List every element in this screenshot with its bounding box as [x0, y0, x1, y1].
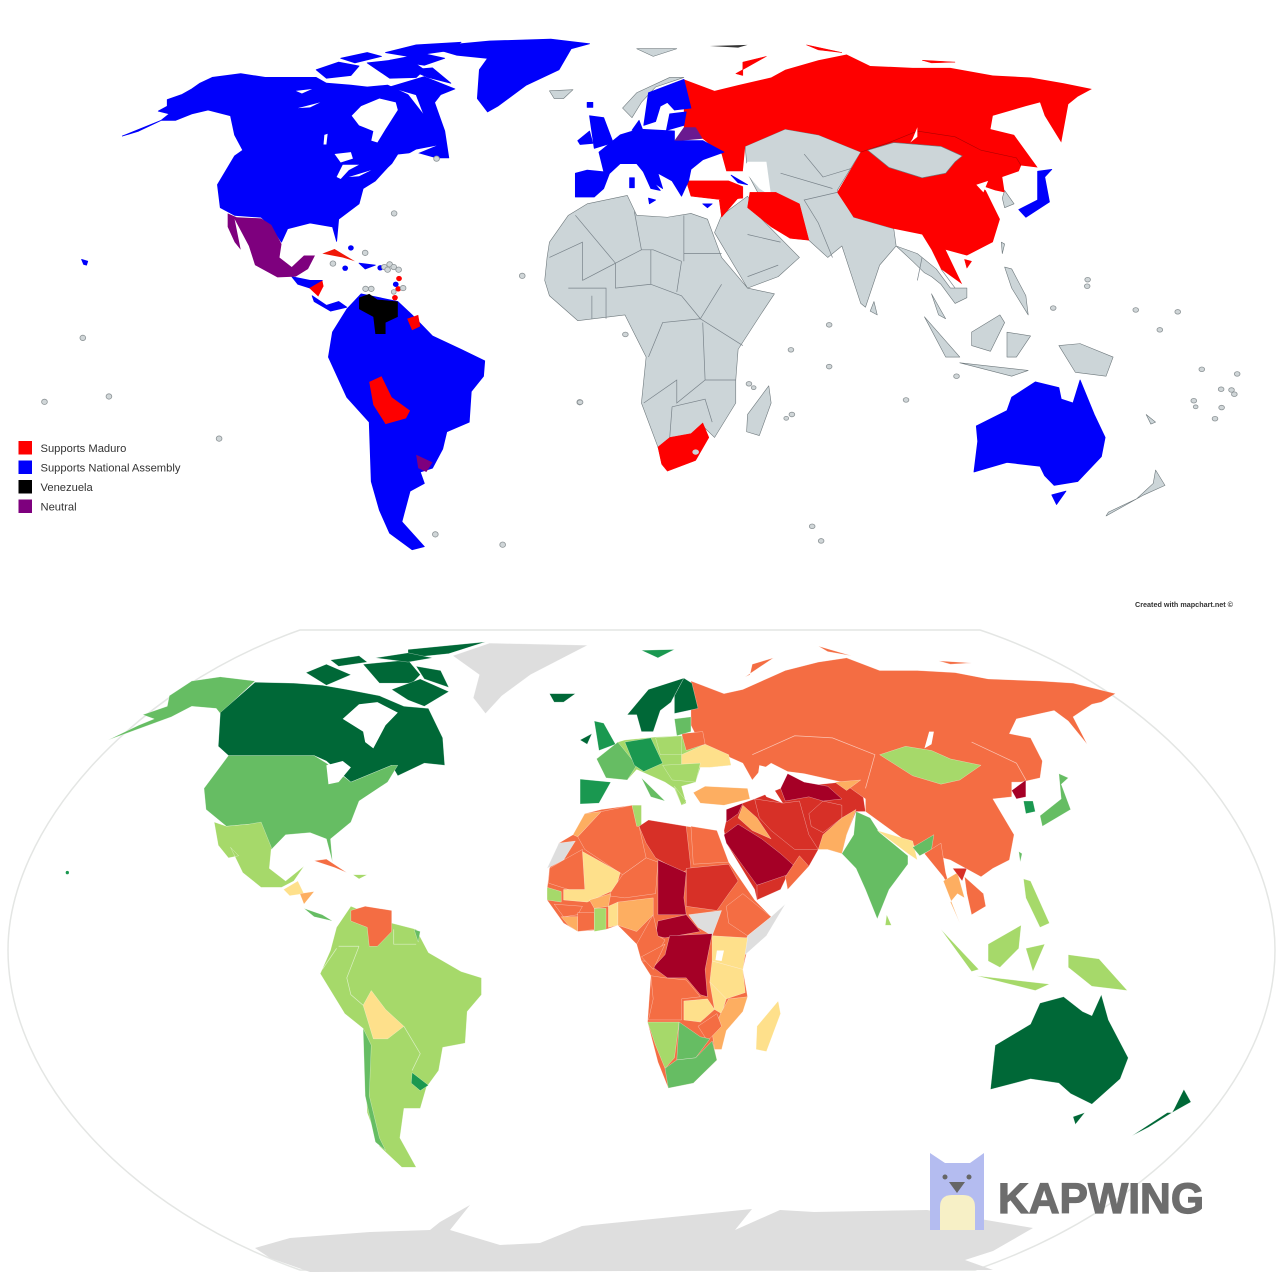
Ivory Coast	[578, 913, 594, 932]
Philippines	[1023, 879, 1049, 927]
blue islands	[342, 245, 399, 287]
French Guiana	[414, 929, 420, 942]
legend	[18, 441, 181, 514]
Lake Victoria	[715, 950, 724, 961]
China and Russia border	[861, 131, 1021, 166]
Arctic island west	[818, 646, 851, 656]
Morocco	[573, 812, 601, 837]
Svalbard	[641, 649, 674, 658]
americas, Greenland and islands	[42, 39, 590, 550]
Central African Republic	[656, 915, 700, 938]
cut-outs of Okhotsk and Bohai	[910, 127, 988, 192]
mapchart credit: Created with mapchart.net ©	[1135, 601, 1234, 609]
Turkmenistan and Uzbekistan	[781, 774, 842, 801]
Canadian Arctic islands	[306, 642, 486, 706]
Saudi Arabia	[724, 824, 797, 885]
Sulawesi	[1026, 944, 1045, 972]
Greenland	[453, 643, 588, 713]
legend item: Supports National Assembly: Supports National Assembly	[40, 462, 181, 474]
Caspian	[743, 162, 771, 196]
Guyana	[407, 315, 420, 330]
Sudan	[686, 864, 738, 910]
legend item: Neutral	[18, 500, 77, 514]
Malawi	[710, 982, 726, 1014]
Kyrgyzstan and Tajikistan	[835, 780, 861, 791]
New Zealand south island	[1132, 1113, 1172, 1136]
Hawaii	[66, 871, 69, 874]
Africa base	[547, 805, 771, 1088]
Iraq	[738, 805, 771, 839]
map outline	[8, 630, 1275, 1270]
United Kingdom	[594, 721, 615, 751]
Ireland	[580, 734, 592, 744]
Guatemala	[284, 881, 304, 896]
Nigeria	[618, 898, 653, 932]
South American borders	[322, 929, 420, 1070]
Congo and Gabon	[641, 944, 665, 969]
Finland	[674, 678, 698, 713]
Borneo	[988, 925, 1021, 967]
Russia and China	[684, 54, 1092, 284]
Turkey	[693, 786, 750, 805]
Laos	[953, 868, 967, 881]
Africa gray	[545, 49, 1165, 516]
Australia	[974, 380, 1105, 485]
Hudson Bay and lakes	[296, 89, 437, 179]
South America	[320, 906, 481, 1167]
DR Congo	[653, 934, 712, 997]
legend item: Venezuela: Venezuela	[40, 482, 94, 494]
Lake Baikal	[924, 732, 934, 748]
Canada	[218, 682, 445, 782]
legend item: Supports Maduro: Supports Maduro	[40, 443, 126, 455]
Germany and Central Europe	[625, 738, 663, 772]
Nepal and Bangladesh	[877, 830, 917, 860]
Svalbard and Franz Josef	[710, 45, 748, 48]
Libya	[639, 820, 691, 873]
Niger	[608, 858, 658, 898]
Italy	[641, 778, 665, 801]
Mozambique	[712, 997, 748, 1049]
Antarctica	[255, 1205, 1033, 1272]
Iceland	[549, 694, 575, 702]
panel: top map, support for Maduro or National Assembly	[18, 39, 1240, 609]
South Africa	[665, 1041, 717, 1088]
Mongolia	[880, 746, 981, 784]
Alaska	[108, 677, 255, 740]
Haiti and Dominican Republic	[353, 875, 367, 879]
Arctic island east	[939, 661, 972, 664]
Mali	[564, 852, 620, 902]
Poland	[656, 736, 682, 755]
wordmark: KAPWING	[998, 1175, 1204, 1223]
central and south Asia	[745, 129, 967, 307]
Burkina Faso	[590, 894, 611, 908]
Romania and Bulgaria	[663, 763, 700, 782]
United States	[204, 756, 398, 862]
Europe base	[597, 736, 731, 805]
Sierra Leone and Liberia	[561, 917, 578, 932]
South Sudan	[689, 910, 722, 936]
gray island markers	[42, 156, 583, 547]
Mongolia	[868, 143, 962, 178]
Cuba	[322, 249, 355, 261]
Chile	[363, 1028, 386, 1150]
legend item: Supports Maduro	[18, 441, 126, 455]
panel: bottom map, colored world choropleth	[8, 630, 1275, 1272]
Java	[976, 976, 1049, 990]
Taiwan	[1019, 852, 1022, 862]
Europe, Japan and Australia in blue	[575, 79, 1105, 504]
Botswana	[677, 1022, 710, 1060]
North Korea	[1012, 780, 1026, 799]
Novaya Zemlya	[745, 658, 773, 677]
watermark: Kapwing logo	[930, 1153, 1204, 1230]
Myanmar	[924, 843, 950, 889]
Western Sahara	[547, 841, 575, 868]
Tunisia	[632, 805, 641, 826]
icon: Kapwing cat	[930, 1153, 984, 1230]
Thailand and Cambodia	[943, 873, 965, 923]
Cameroon	[637, 915, 665, 961]
Somalia	[738, 904, 785, 961]
India	[842, 812, 908, 919]
Bolivia	[369, 376, 410, 424]
Sri Lanka	[885, 915, 891, 925]
Middle East and South Asia base	[724, 780, 865, 900]
Great Lakes	[326, 761, 351, 784]
France	[597, 742, 637, 780]
Americas choropleth	[66, 642, 588, 1167]
Spain and Portugal	[580, 779, 611, 804]
Madagascar	[756, 1001, 781, 1052]
Sumatra	[941, 929, 979, 972]
Arabia	[715, 196, 799, 288]
Hudson Bay	[343, 702, 398, 748]
Greenland	[428, 39, 590, 112]
Uganda and Kenya	[712, 936, 748, 969]
legend item: Neutral: Neutral	[40, 502, 77, 514]
Baltics	[674, 717, 691, 736]
Algeria	[578, 805, 646, 875]
northeast India	[913, 835, 934, 856]
Caribbean dots	[392, 276, 402, 300]
Ethiopia	[726, 894, 771, 936]
Balkans	[674, 786, 686, 805]
red countries in Asia and Africa	[658, 45, 972, 471]
Venezuela	[351, 906, 392, 946]
Benin and Togo	[608, 902, 618, 927]
Angola	[648, 976, 700, 1020]
Australia	[990, 995, 1128, 1104]
Ukraine	[682, 744, 731, 767]
legend item: Venezuela	[18, 480, 94, 494]
Yemen	[757, 875, 788, 900]
Russia borders with Kazakhstan and China	[752, 736, 1026, 788]
Russia, Kazakhstan and China	[691, 658, 1115, 877]
Mexico neutral	[228, 213, 315, 277]
Uruguay	[411, 1073, 428, 1091]
Honduras	[300, 892, 314, 904]
gray ocean island markers	[577, 277, 1240, 543]
Oman	[785, 856, 809, 889]
Ghana	[594, 908, 606, 932]
Mexico	[214, 822, 304, 887]
Egypt	[691, 826, 729, 864]
Eurasia, Africa and Oceania choropleth	[547, 646, 1191, 1136]
Venezuela	[359, 294, 398, 334]
North America in blue	[82, 39, 590, 550]
Syria	[726, 803, 743, 822]
Nicaragua	[309, 280, 324, 297]
Namibia	[648, 1022, 679, 1068]
Norway and Sweden	[627, 678, 684, 732]
Tasmania	[1073, 1113, 1085, 1124]
Uruguay neutral	[416, 455, 432, 472]
Chad	[658, 860, 686, 915]
Belarus	[682, 732, 705, 751]
Caspian Sea	[757, 765, 783, 803]
Belarus neutral	[674, 127, 703, 141]
Lesotho	[692, 449, 699, 455]
Costa Rica and Panama	[304, 908, 333, 921]
Zambia	[684, 999, 715, 1022]
Tanzania	[710, 961, 745, 999]
New Zealand north island	[1172, 1089, 1191, 1113]
Mauritania	[548, 849, 587, 894]
Bolivia	[363, 990, 404, 1039]
Japan	[1040, 774, 1071, 826]
New Guinea	[1068, 955, 1127, 990]
Zimbabwe	[698, 1014, 722, 1041]
Senegal	[547, 887, 561, 902]
Eurasia, Africa and Oceania	[545, 45, 1240, 543]
South America	[328, 294, 485, 550]
Pakistan	[818, 809, 856, 854]
South Korea	[1023, 801, 1035, 814]
border lines of Africa and Asia	[549, 154, 955, 437]
Afghanistan	[809, 801, 842, 833]
Iran	[755, 799, 818, 849]
Vietnam	[965, 877, 986, 915]
Cuba	[314, 859, 347, 873]
Guinea	[554, 904, 582, 917]
